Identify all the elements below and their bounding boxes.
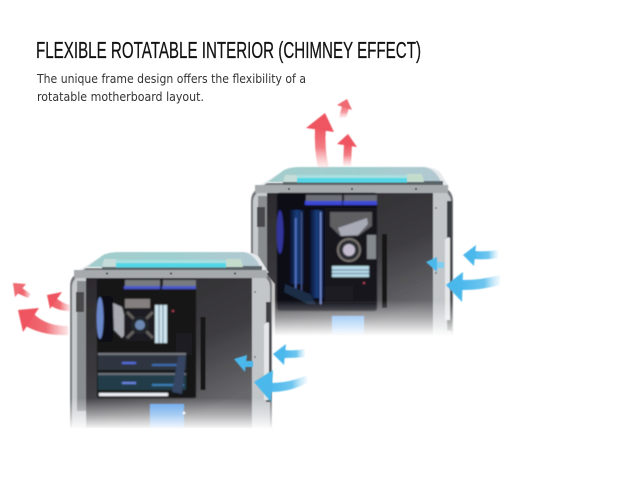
left case: standard interior (68, 251, 275, 428)
frame rail (74, 270, 267, 278)
vent slots (200, 317, 206, 390)
interior with motherboard (276, 193, 377, 311)
small up arrow (337, 99, 352, 118)
medium intake arrow (273, 344, 305, 365)
description text (36, 72, 306, 104)
left case bottom fade (64, 398, 278, 440)
medium up arrow (337, 134, 357, 166)
right case bottom fade (245, 300, 460, 348)
arrows: exhaust up, right case (306, 99, 357, 168)
arrows: exhaust left, left case (13, 283, 70, 335)
title: FLEXIBLE ROTATABLE INTERIOR (CHIMNEY EFFECT) (36, 37, 421, 63)
large left arrow (18, 308, 68, 335)
vent slots (382, 234, 387, 308)
top panel with light strip (257, 167, 450, 188)
description text: rotatable motherboard layout. (37, 90, 204, 104)
right case: rotated interior (251, 167, 453, 336)
side screw dots (254, 291, 256, 293)
large up arrow (306, 113, 334, 168)
glass window (86, 278, 252, 428)
case shell (70, 268, 272, 428)
side screw dots (435, 207, 437, 209)
large intake arrow (254, 370, 307, 402)
frame rail (255, 185, 448, 193)
arrows: intake, right case (426, 245, 500, 302)
arrows: intake, left case (234, 344, 307, 402)
description text: The unique frame design offers the flexibility of a (36, 72, 306, 86)
glass window (267, 193, 433, 336)
case shell (251, 183, 453, 336)
top panel with light strip (76, 252, 269, 273)
interior with motherboard (96, 279, 196, 398)
blue floor patch (332, 316, 364, 334)
small intake arrow (426, 257, 444, 272)
small intake arrow (234, 355, 253, 372)
blue floor patch (150, 404, 184, 428)
separating edge (68, 251, 275, 428)
large intake arrow (446, 272, 500, 302)
medium left arrow (47, 292, 70, 311)
small left arrow (13, 283, 31, 298)
medium intake arrow (463, 245, 498, 266)
